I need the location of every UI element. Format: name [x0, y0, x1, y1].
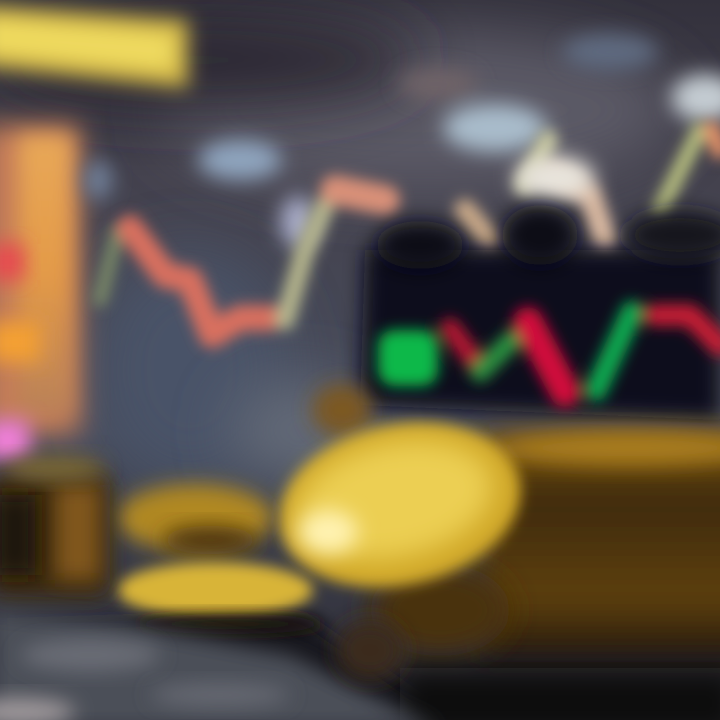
white peak highlight: [515, 156, 595, 200]
yellow banner: [0, 5, 188, 88]
line chart: [100, 130, 720, 335]
candlesticks: [378, 312, 720, 392]
large gold coin: [264, 401, 536, 609]
gold pot: [312, 384, 720, 720]
clouds: [84, 34, 720, 248]
bottom dark base: [0, 615, 450, 720]
left glowing column: [0, 125, 80, 460]
small gold coin pile: [117, 484, 325, 634]
dark chart panel: [360, 205, 720, 420]
small gold jar: [0, 456, 110, 597]
stone foreground: [0, 610, 440, 720]
